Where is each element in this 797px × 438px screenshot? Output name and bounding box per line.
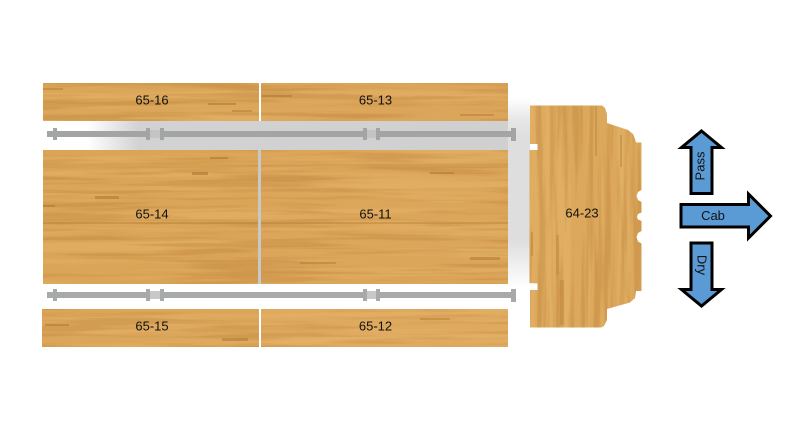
panel: 65-14: 65-14	[135, 206, 169, 222]
panel: 65-16	[43, 83, 259, 121]
shadow band behind upper rail	[45, 121, 515, 150]
panel: 65-15	[42, 309, 259, 347]
panel: 64-23: 64-23	[565, 206, 599, 220]
panel: 65-16: 65-16	[135, 92, 169, 108]
upper rail	[47, 128, 516, 141]
panel: 65-13: 65-13	[359, 92, 392, 108]
panel: 64-23	[529, 105, 642, 328]
panel: 65-15: 65-15	[135, 318, 169, 334]
arrow: Cab	[681, 194, 770, 238]
shadow behind cab gap	[508, 98, 530, 288]
panel: 65-12	[261, 309, 508, 347]
gap between centre panels	[258, 150, 261, 284]
arrow: Cab: Cab	[701, 208, 725, 223]
panel: 65-12: 65-12	[359, 318, 392, 334]
panel: 65-11: 65-11	[359, 206, 392, 222]
panel: 65-11	[261, 150, 508, 284]
panel: 65-13	[261, 83, 508, 121]
floor panel diagram	[42, 83, 772, 347]
arrow: Pass: Pass	[692, 151, 708, 180]
lower rail	[47, 289, 516, 302]
arrow: Dry	[682, 243, 722, 306]
arrow: Dry: Dry	[694, 255, 710, 276]
arrow: Pass	[682, 131, 722, 194]
panel: 65-14	[43, 150, 258, 284]
